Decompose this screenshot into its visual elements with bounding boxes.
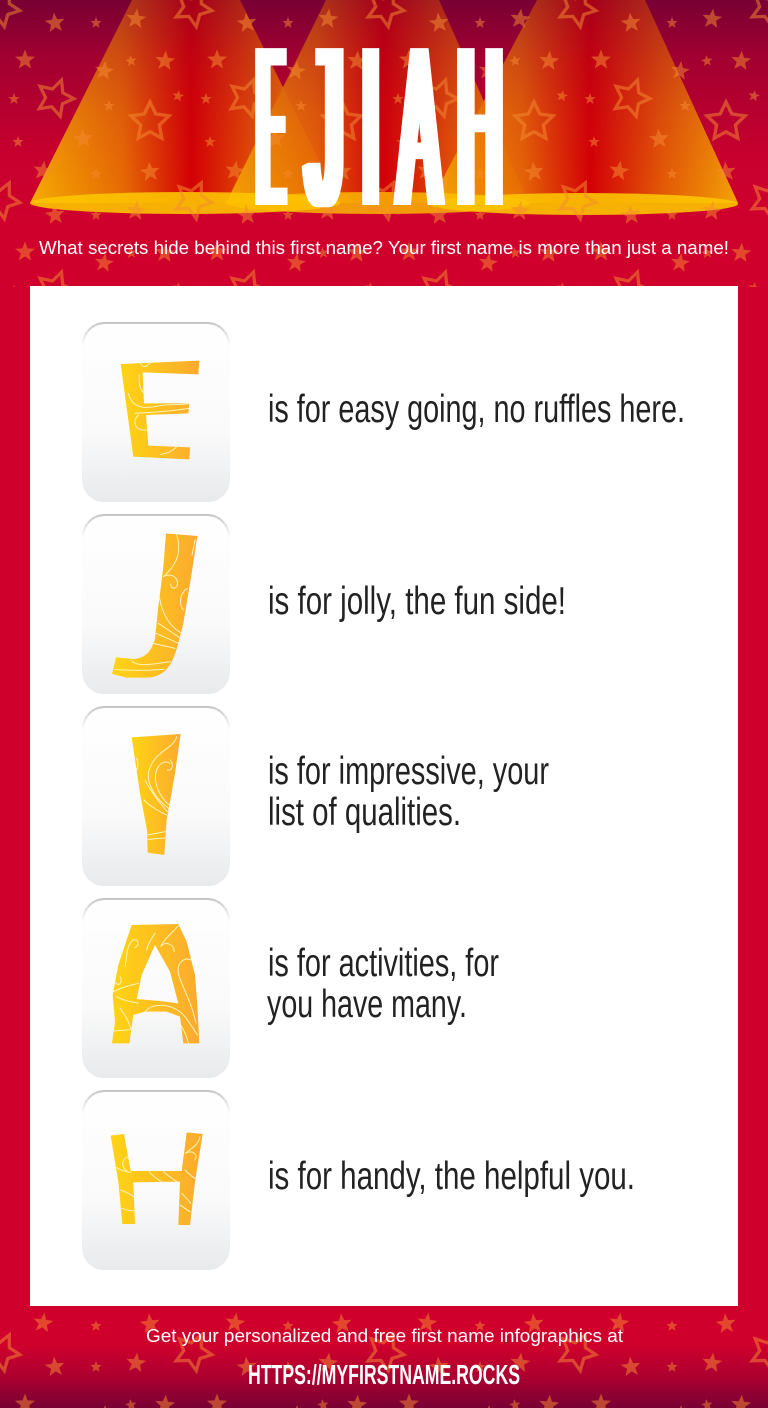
title: J xyxy=(307,0,343,253)
title: A xyxy=(399,0,440,254)
panel: white content xyxy=(30,286,738,1306)
text: I lines: is for impressive, your xyxy=(268,750,549,793)
spotlights xyxy=(30,0,738,215)
row: J xyxy=(82,514,566,694)
row: A xyxy=(82,898,499,1078)
icon: letter A card xyxy=(82,898,230,1078)
icon: letter I card xyxy=(82,706,230,886)
title: H xyxy=(458,0,502,254)
row: H xyxy=(82,1090,635,1270)
footer url: HTTPS://MYFIRSTNAME.ROCKS xyxy=(248,1359,520,1390)
text: H line: is for handy, the helpful you. xyxy=(268,1155,635,1198)
icon: letter J card xyxy=(82,514,230,694)
text: A lines: is for activities, for xyxy=(268,942,499,985)
text: I lines xyxy=(268,750,549,834)
title xyxy=(258,0,502,255)
title: E xyxy=(258,0,283,254)
text: A lines xyxy=(267,942,499,1026)
footer text: Get your personalized and free first name infographics at xyxy=(146,1326,623,1346)
text: A lines: you have many. xyxy=(267,983,467,1026)
icon: letter H card xyxy=(82,1090,230,1270)
row: E xyxy=(82,322,685,502)
row: I xyxy=(82,706,549,886)
text: J line: is for jolly, the fun side! xyxy=(268,580,566,623)
title: I xyxy=(363,0,378,255)
subtitle: What secrets hide behind this first name? Your first name is more than just a name! xyxy=(39,238,729,258)
text: I lines: list of qualities. xyxy=(268,791,461,834)
icon: letter E card xyxy=(82,322,230,502)
